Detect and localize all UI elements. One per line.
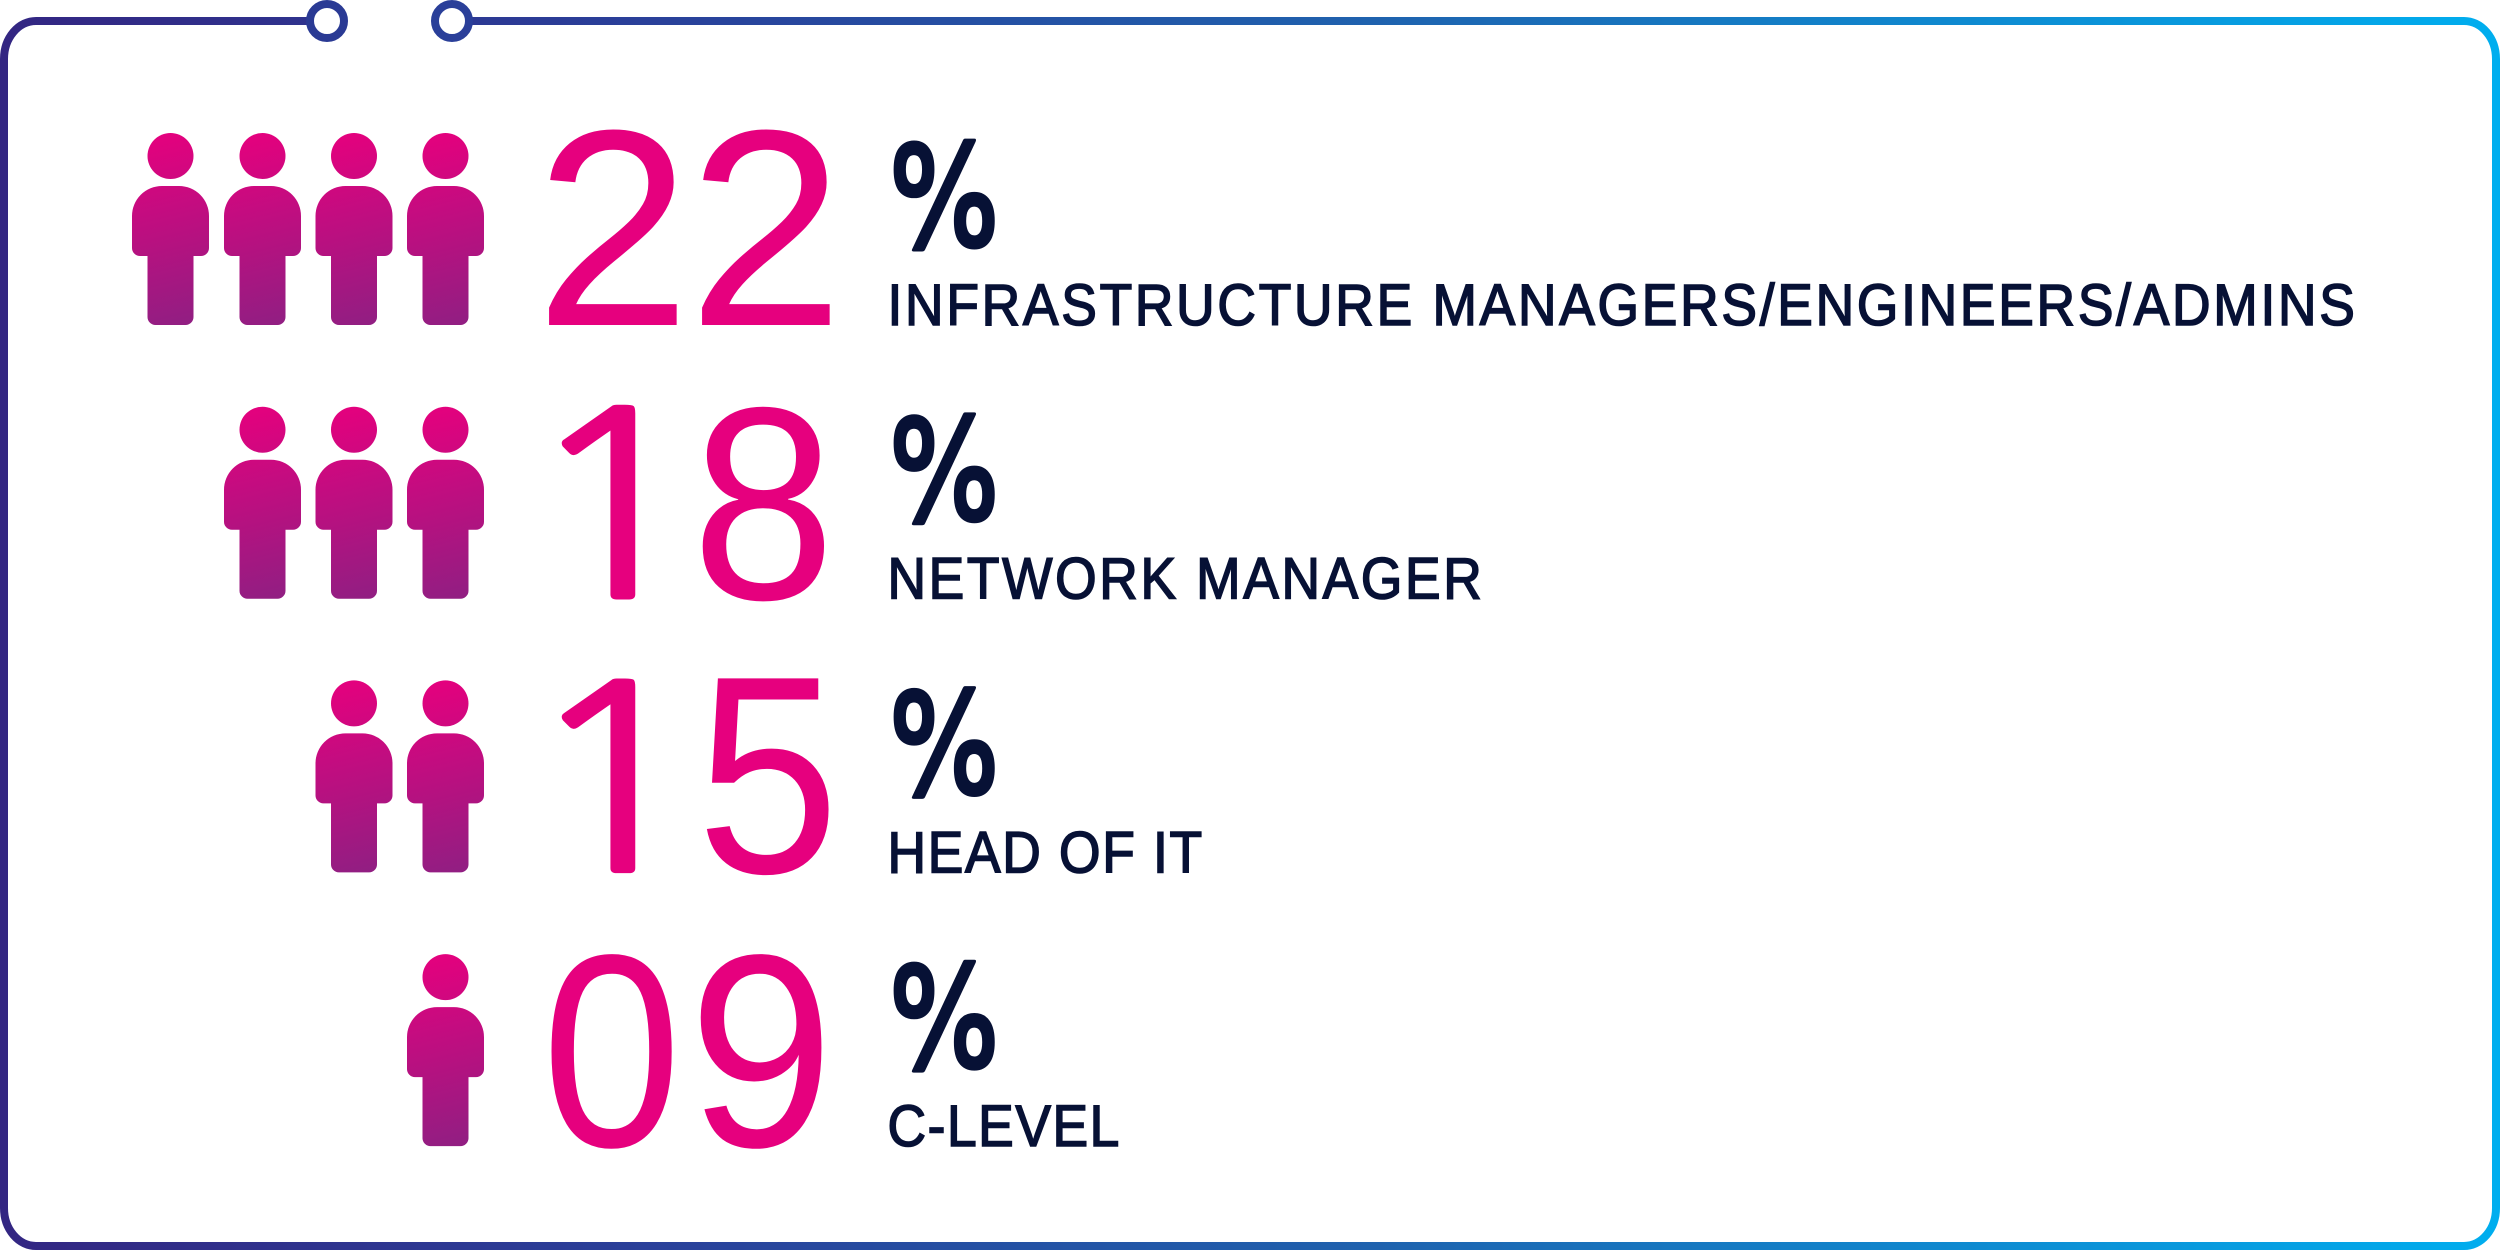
number 15 bbox=[520, 618, 839, 933]
row: 22% infrastructure bbox=[132, 73, 2355, 385]
number 22 bbox=[535, 73, 844, 385]
icon: two people bbox=[316, 680, 484, 872]
frame connector node right bbox=[435, 4, 469, 38]
row: 15% head of IT bbox=[316, 618, 1202, 933]
number 22: 2 bbox=[535, 73, 691, 385]
percent sign: % bbox=[880, 132, 1008, 271]
number 15: 5 bbox=[697, 618, 839, 933]
percent sign: % bbox=[880, 953, 1008, 1092]
icon: one person bbox=[407, 954, 484, 1146]
row: 09% C-level bbox=[407, 897, 1119, 1205]
frame connector node left bbox=[310, 4, 344, 38]
icon: three people bbox=[224, 407, 484, 599]
number 22: 2 bbox=[688, 73, 844, 385]
label: HEAD OF IT bbox=[888, 820, 1202, 885]
number 18 bbox=[520, 349, 835, 657]
number 18: 1 bbox=[520, 377, 707, 634]
percent sign: % bbox=[880, 406, 1008, 544]
number 09 bbox=[542, 897, 834, 1205]
number 15: 1 bbox=[520, 651, 707, 908]
label: INFRASTRUCTURE MANAGERS/ENGINEERS/ADMINS bbox=[888, 273, 2355, 337]
icon: four people bbox=[132, 133, 484, 325]
label: C-LEVEL bbox=[888, 1094, 1119, 1159]
label: NETWORK MANAGER bbox=[888, 547, 1482, 611]
number 09: 0 bbox=[542, 898, 681, 1205]
number 18: 8 bbox=[692, 349, 835, 657]
number 09: 9 bbox=[688, 897, 834, 1205]
row: 18% network manager bbox=[224, 349, 1482, 657]
percent sign: % bbox=[880, 679, 1008, 818]
